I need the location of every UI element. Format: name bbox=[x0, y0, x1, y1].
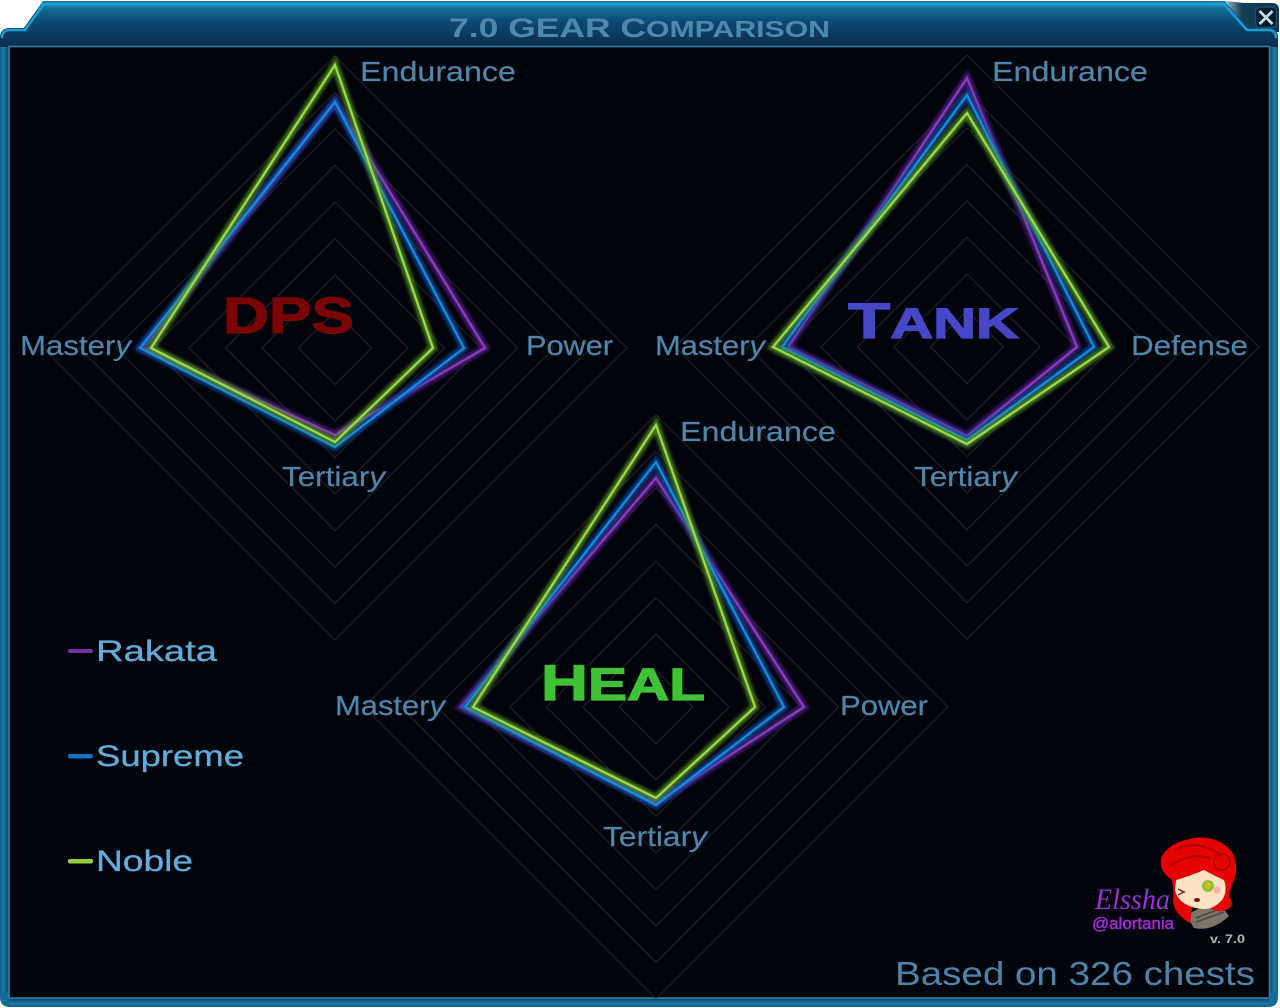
author signature: @alortania bbox=[1092, 914, 1175, 933]
series: Rakata bbox=[461, 478, 804, 803]
axis labels: Power bbox=[526, 330, 613, 361]
axis labels: Defense bbox=[1131, 330, 1248, 361]
author signature: Elssha bbox=[1094, 883, 1170, 916]
legend item: Supreme bbox=[68, 740, 244, 773]
series: Supreme bbox=[782, 95, 1094, 440]
legend item: Rakata bbox=[68, 635, 217, 668]
legend item: Noble: Noble bbox=[96, 845, 193, 878]
legend item: Noble bbox=[68, 845, 193, 878]
axis labels: Tertiar y bbox=[914, 461, 1019, 492]
series: Supreme bbox=[140, 102, 464, 447]
radar chart: Heal bbox=[335, 415, 948, 999]
axis labels: Master y bbox=[20, 330, 133, 361]
title: 7.0 GEAR C OMPARISON bbox=[449, 13, 830, 43]
heading: Tank: T ANK bbox=[848, 293, 1019, 349]
axis labels bbox=[20, 56, 613, 492]
series: Noble bbox=[151, 65, 433, 442]
axis labels bbox=[335, 416, 928, 852]
radar chart: DPS bbox=[20, 56, 627, 640]
legend item: Rakata: Rakata bbox=[96, 635, 217, 668]
icon: close button bbox=[1256, 7, 1276, 28]
series: Noble bbox=[473, 425, 755, 798]
legend item: Supreme: Supreme bbox=[96, 740, 244, 773]
heading: Heal: HEAL bbox=[541, 655, 705, 711]
axis labels: Master y bbox=[335, 690, 447, 721]
author signature bbox=[1092, 883, 1175, 933]
axis labels: Tertiar y bbox=[282, 461, 387, 492]
axis labels: Power bbox=[840, 690, 928, 721]
axis labels: Endurance bbox=[992, 56, 1148, 87]
axis labels: Endurance bbox=[680, 416, 836, 447]
source note: Based on 326 chests bbox=[895, 955, 1255, 992]
author avatar bbox=[1161, 838, 1236, 929]
series: Rakata bbox=[143, 102, 485, 435]
heading: DPS: DPS bbox=[223, 287, 354, 344]
radar chart: Tank bbox=[655, 55, 1259, 639]
axis labels: Tertiar y bbox=[603, 821, 709, 852]
series: Supreme bbox=[465, 462, 784, 805]
axis labels: Master y bbox=[655, 330, 767, 361]
series: Noble bbox=[773, 113, 1109, 444]
version note: v. 7.0 bbox=[1210, 932, 1245, 946]
axis labels bbox=[655, 56, 1248, 492]
series: Rakata bbox=[788, 78, 1077, 436]
legend bbox=[68, 635, 244, 878]
axis labels: Endurance bbox=[360, 56, 516, 87]
